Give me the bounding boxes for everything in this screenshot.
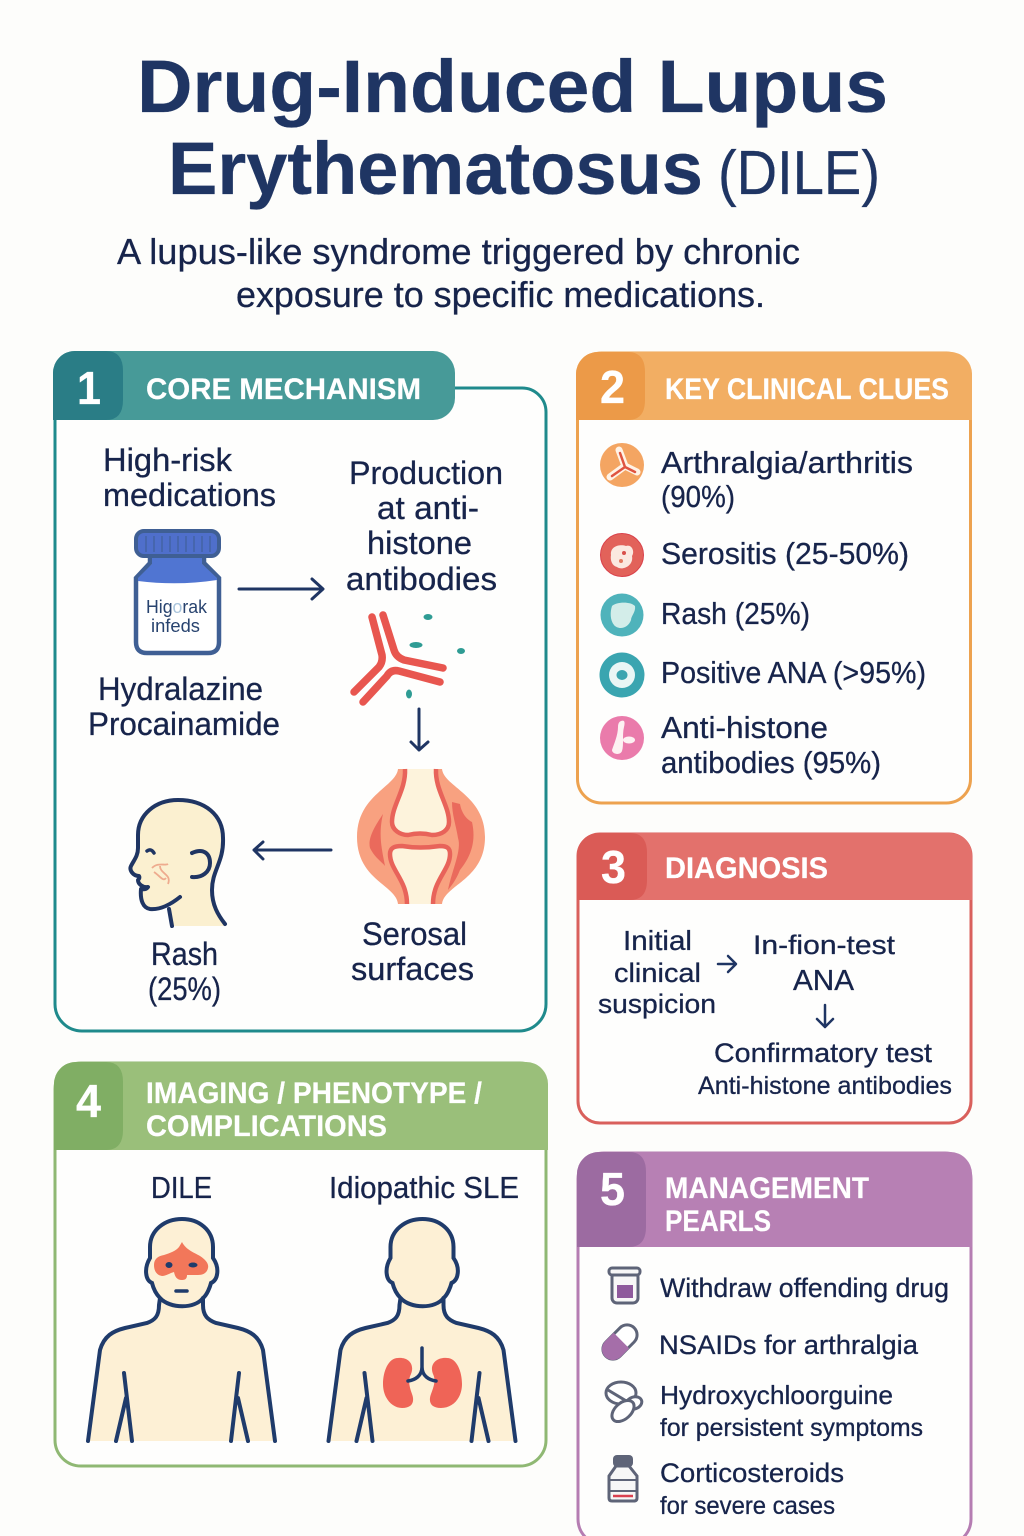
subtitle (117, 231, 800, 315)
clue: positive ANA: Positive ANA (>95%) (661, 655, 926, 690)
panel: diagnosis (577, 833, 972, 1123)
figure: DILE malar rash (88, 1170, 275, 1441)
panel header: diagnosis: DIAGNOSIS (665, 852, 828, 885)
text: confirmatory test: Anti-histone antibodies (698, 1072, 952, 1100)
clue: anti-histone antibodies (600, 710, 881, 780)
subtitle: A lupus-like syndrome triggered by chronic (117, 231, 800, 272)
text: production of antibodies (346, 455, 503, 597)
icon: medication bottle: infeds (151, 615, 200, 636)
panel header: key clinical clues (576, 352, 972, 420)
text: rash 25%: Rash (151, 936, 218, 972)
text: hydralazine procainamide: Procainamide (88, 706, 280, 742)
text: serosal surfaces: Serosal (362, 916, 467, 952)
text: hydralazine procainamide (88, 671, 280, 742)
text: serosal surfaces (351, 916, 474, 987)
icon: medication bottle (136, 531, 219, 653)
panel: key clinical clues (576, 352, 972, 803)
pearl: hydroxychloroquine: Hydroxychloorguine (660, 1380, 893, 1410)
figure: idiopathic SLE with kidneys (328, 1170, 519, 1441)
title: (DILE) (718, 139, 880, 208)
title: Erythematosus (168, 127, 703, 210)
pearl: NSAIDs: NSAIDs for arthralgia (659, 1330, 919, 1360)
clue: anti-histone antibodies: Anti-histone (661, 710, 828, 745)
panel: management pearls (577, 1152, 972, 1536)
clue: rash (600, 594, 810, 636)
panel header: imaging phenotype complications: COMPLICATIONS (146, 1110, 387, 1143)
text: serosal surfaces: surfaces (351, 951, 474, 987)
title: Drug-Induced Lupus (137, 45, 888, 128)
icon: head profile with rash (130, 800, 225, 926)
text: production of antibodies: at anti- (377, 490, 479, 526)
pearl: NSAIDs (597, 1320, 919, 1365)
pearl: withdraw offending drug: Withdraw offending drug (660, 1273, 949, 1303)
icon: medication bottle: Higorak (146, 596, 208, 617)
panel header: management pearls: 5 (600, 1163, 625, 1215)
text: production of antibodies: Production (349, 455, 503, 491)
text: screening test ANA (753, 930, 896, 997)
icon: joint (357, 769, 485, 904)
subtitle: exposure to specific medications. (236, 274, 765, 315)
text: production of antibodies: antibodies (346, 561, 497, 597)
pearl: hydroxychloroquine: for persistent symptoms (660, 1414, 923, 1442)
text: initial clinical suspicion: Initial (623, 925, 692, 956)
text: hydralazine procainamide: Hydralazine (98, 671, 263, 707)
clue: serositis (600, 534, 909, 576)
pearl: corticosteroids: for severe cases (660, 1492, 835, 1520)
panel header: imaging phenotype complications: 4 (76, 1075, 101, 1127)
text: screening test ANA: In-fion-test (753, 930, 896, 960)
pearl: corticosteroids (609, 1455, 844, 1520)
text: screening test ANA: ANA (793, 965, 855, 997)
icon: antibody (354, 614, 465, 702)
panel header: core mechanism: CORE MECHANISM (146, 373, 421, 406)
arrow: medication to antibodies (239, 579, 323, 599)
arrow: antibodies to serosal surfaces (411, 709, 428, 750)
panel header: core mechanism: 1 (77, 362, 101, 414)
clue: arthralgia: (90%) (661, 479, 735, 514)
text: initial clinical suspicion: clinical (614, 958, 701, 988)
panel header: diagnosis (577, 833, 972, 900)
figure: idiopathic SLE with kidneys: Idiopathic SLE (329, 1170, 519, 1205)
panel header: management pearls: MANAGEMENT (665, 1172, 869, 1205)
text: initial clinical suspicion: suspicion (598, 989, 716, 1019)
text: confirmatory test: Confirmatory test (714, 1038, 933, 1068)
figure: DILE malar rash: DILE (151, 1170, 212, 1205)
clue: positive ANA (600, 652, 926, 698)
clue: rash: Rash (25%) (661, 596, 810, 631)
arrow: ANA to confirmatory (817, 1005, 833, 1027)
clue: arthralgia (600, 443, 913, 514)
clue: anti-histone antibodies: antibodies (95%) (661, 745, 881, 780)
panel header: management pearls: PEARLS (665, 1205, 771, 1238)
clue: serositis: Serositis (25-50%) (661, 536, 909, 571)
panel header: management pearls (577, 1152, 972, 1247)
clue: arthralgia: Arthralgia/arthritis (661, 445, 913, 480)
text: high-risk medications: medications (103, 477, 276, 513)
text: high-risk medications (103, 442, 276, 513)
pearl: hydroxychloroquine (606, 1380, 923, 1442)
panel header: core mechanism (53, 351, 455, 420)
panel header: key clinical clues: KEY CLINICAL CLUES (665, 373, 949, 406)
text: high-risk medications: High-risk (103, 442, 233, 478)
text: rash 25%: (25%) (148, 971, 221, 1007)
panel header: diagnosis: 3 (601, 841, 626, 893)
text: production of antibodies: histone (367, 525, 472, 561)
pearl: corticosteroids: Corticosteroids (660, 1458, 844, 1488)
panel header: key clinical clues: 2 (600, 361, 625, 413)
text: initial clinical suspicion (598, 925, 716, 1019)
panel: imaging phenotype complications (54, 1062, 548, 1466)
text: rash 25% (148, 936, 221, 1007)
panel header: imaging phenotype complications (54, 1062, 548, 1150)
panel: core mechanism (53, 351, 546, 1031)
panel header: imaging phenotype complications: IMAGING / PHENOTYPE / (146, 1077, 483, 1110)
arrow: suspicion to test (718, 956, 736, 972)
text: confirmatory test (698, 1038, 952, 1100)
arrow: serosal surfaces to rash (254, 842, 331, 859)
title (137, 45, 888, 210)
